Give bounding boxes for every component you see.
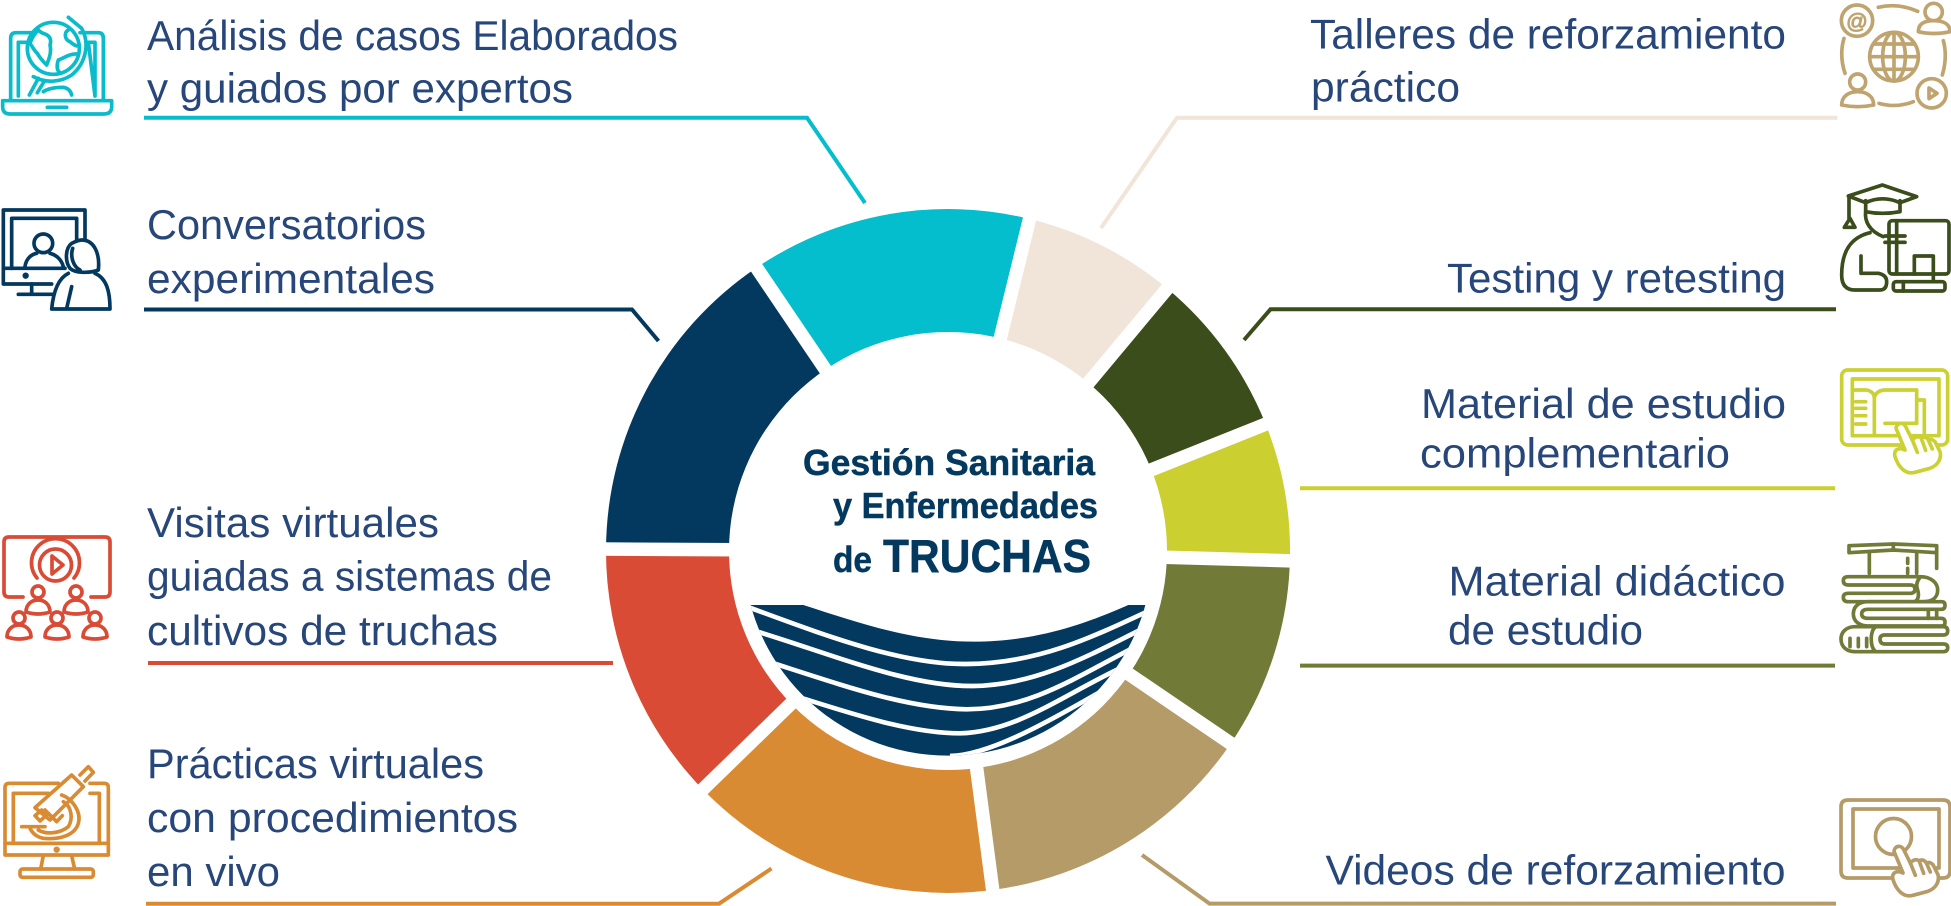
label: Prácticas virtuales: Prácticas virtuales <box>147 740 484 787</box>
connector <box>1300 486 1835 490</box>
waves logo <box>750 605 1146 756</box>
segment: videos <box>948 551 1231 890</box>
icon: laptop with globe <box>3 17 112 114</box>
icon: graduate at computer <box>1842 185 1949 291</box>
label: Prácticas virtuales <box>146 740 772 904</box>
icon: video conversation <box>3 210 110 309</box>
icon: digital book on tablet <box>1842 370 1948 473</box>
segment: visitas virtuales <box>606 549 948 789</box>
icon: touch tablet <box>1841 800 1950 896</box>
center title <box>803 442 1098 582</box>
segment: conversatorios <box>606 268 948 551</box>
label: Visitas virtuales: Visitas virtuales <box>147 499 439 546</box>
label: Material complementario: complementario <box>1420 430 1730 476</box>
label: Talleres: práctico <box>1311 64 1460 110</box>
center title: TRUCHAS <box>883 530 1091 582</box>
label: Conversatorios: experimentales <box>147 255 435 302</box>
label: Videos <box>1142 846 1836 904</box>
label: Material complementario: Material de estudio <box>1421 380 1786 427</box>
segment: material complementario <box>948 424 1290 561</box>
center title: Gestión Sanitaria <box>803 442 1096 483</box>
segment: testing <box>948 288 1266 551</box>
connector <box>144 310 658 341</box>
segment: prácticas virtuales <box>703 551 993 893</box>
segment: material didáctico <box>948 551 1290 744</box>
label: Videos: Videos de reforzamiento <box>1326 846 1786 894</box>
label: Material didáctico: de estudio <box>1448 606 1643 654</box>
connector <box>1300 664 1835 668</box>
label: Material didáctico <box>1300 558 1835 666</box>
connector <box>1101 118 1838 228</box>
label: Talleres: Talleres de reforzamiento <box>1310 10 1786 58</box>
label: Visitas virtuales <box>147 499 613 663</box>
label: Prácticas virtuales: en vivo <box>147 848 280 895</box>
label: Testing <box>1244 254 1836 340</box>
connector <box>1142 855 1836 904</box>
connector <box>1244 309 1836 340</box>
connector <box>148 661 613 665</box>
label: Prácticas virtuales: con procedimientos <box>147 794 518 841</box>
icon: global network: @ <box>1846 9 1868 33</box>
icon: virtual visit audience <box>4 537 110 639</box>
center title: y Enfermedades <box>833 485 1098 526</box>
label: Visitas virtuales: guiadas a sistemas de <box>147 552 552 600</box>
donut chart <box>600 209 1296 896</box>
icon: global network <box>1841 3 1950 108</box>
label: Material didáctico: Material didáctico <box>1448 558 1786 604</box>
label: Talleres <box>1101 10 1838 228</box>
connector <box>146 868 772 904</box>
connector <box>144 118 865 203</box>
center title: de <box>833 539 872 580</box>
label: Visitas virtuales: cultivos de truchas <box>147 607 498 654</box>
label: Análisis de casos: y guiados por expertos <box>147 64 573 112</box>
label: Análisis de casos <box>144 12 865 203</box>
label: Conversatorios: Conversatorios <box>147 201 426 248</box>
label: Material complementario <box>1300 380 1835 488</box>
icon: stack of books <box>1841 544 1948 652</box>
label: Análisis de casos: Análisis de casos Elaborados <box>147 12 678 59</box>
label: Conversatorios <box>144 201 658 341</box>
icon: microscope on monitor <box>5 767 108 877</box>
label: Testing: Testing y retesting <box>1447 254 1786 302</box>
segment: talleres <box>948 219 1167 551</box>
segment: análisis de casos <box>757 209 1030 551</box>
